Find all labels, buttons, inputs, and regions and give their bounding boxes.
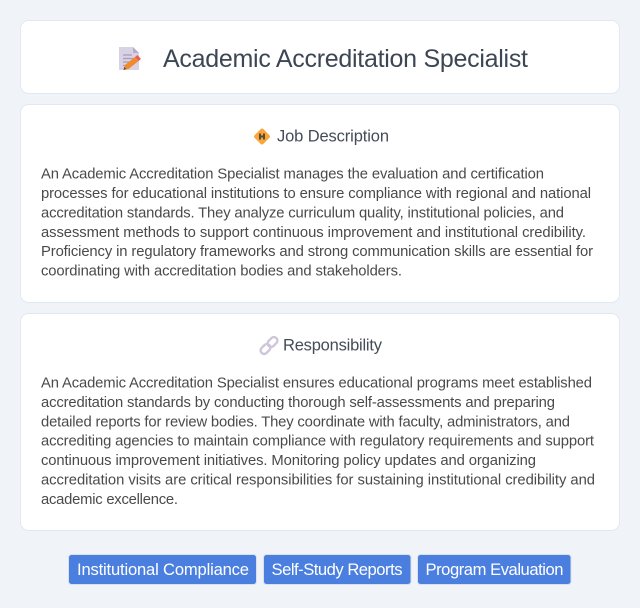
text block: responsibility <box>41 376 595 508</box>
panel: responsibility <box>20 314 620 530</box>
text block: job description: coordinating with accreditation bodies and stakeholders. <box>41 264 402 280</box>
heading: job description: Job Description <box>277 128 389 146</box>
text block: job description: assessment methods to support continuous improvement and institutional credibility. <box>41 225 586 241</box>
panel: title card <box>20 20 620 94</box>
text block: job description: Proficiency in regulatory frameworks and strong communication skills are essential for <box>41 244 593 260</box>
tag: self-study reports: Self-Study Reports <box>272 560 402 579</box>
text block: responsibility: accreditation standards by conducting thorough self-assessments and preparing <box>41 395 555 411</box>
icon: orange diamond sign <box>253 128 271 145</box>
text block: responsibility: accrediting agencies to maintain compliance with regulatory requirements and support <box>41 434 594 450</box>
text block: responsibility: An Academic Accreditation Specialist ensures educational programs meet established <box>41 376 592 392</box>
tag: institutional compliance <box>68 554 256 584</box>
text block: responsibility: accreditation visits are critical responsibilities for sustaining institutional credibility and <box>41 472 595 488</box>
text block: responsibility: continuous improvement initiatives. Monitoring policy updates and organizing <box>41 453 536 469</box>
text block: job description: accreditation standards. They analyze curriculum quality, institutional policies, and <box>41 205 564 221</box>
tag: institutional compliance: Institutional Compliance <box>77 560 249 579</box>
icon: link <box>259 336 279 355</box>
tag: program evaluation <box>418 554 571 584</box>
text block: job description: processes for educational institutions to ensure compliance with regional and national <box>41 186 591 202</box>
text block: responsibility: detailed reports for review bodies. They coordinate with faculty, administrators, and <box>41 414 570 430</box>
icon: memo with pencil <box>119 47 141 70</box>
text block: job description <box>41 166 593 280</box>
title: Academic Accreditation Specialist <box>163 45 528 73</box>
text block: job description: An Academic Accreditation Specialist manages the evaluation and certification <box>41 166 544 182</box>
panel: job description <box>20 104 620 302</box>
tag: self-study reports <box>264 554 411 584</box>
text block: responsibility: academic excellence. <box>41 492 178 508</box>
tag: program evaluation: Program Evaluation <box>426 560 564 579</box>
heading: responsibility: Responsibility <box>283 336 383 354</box>
